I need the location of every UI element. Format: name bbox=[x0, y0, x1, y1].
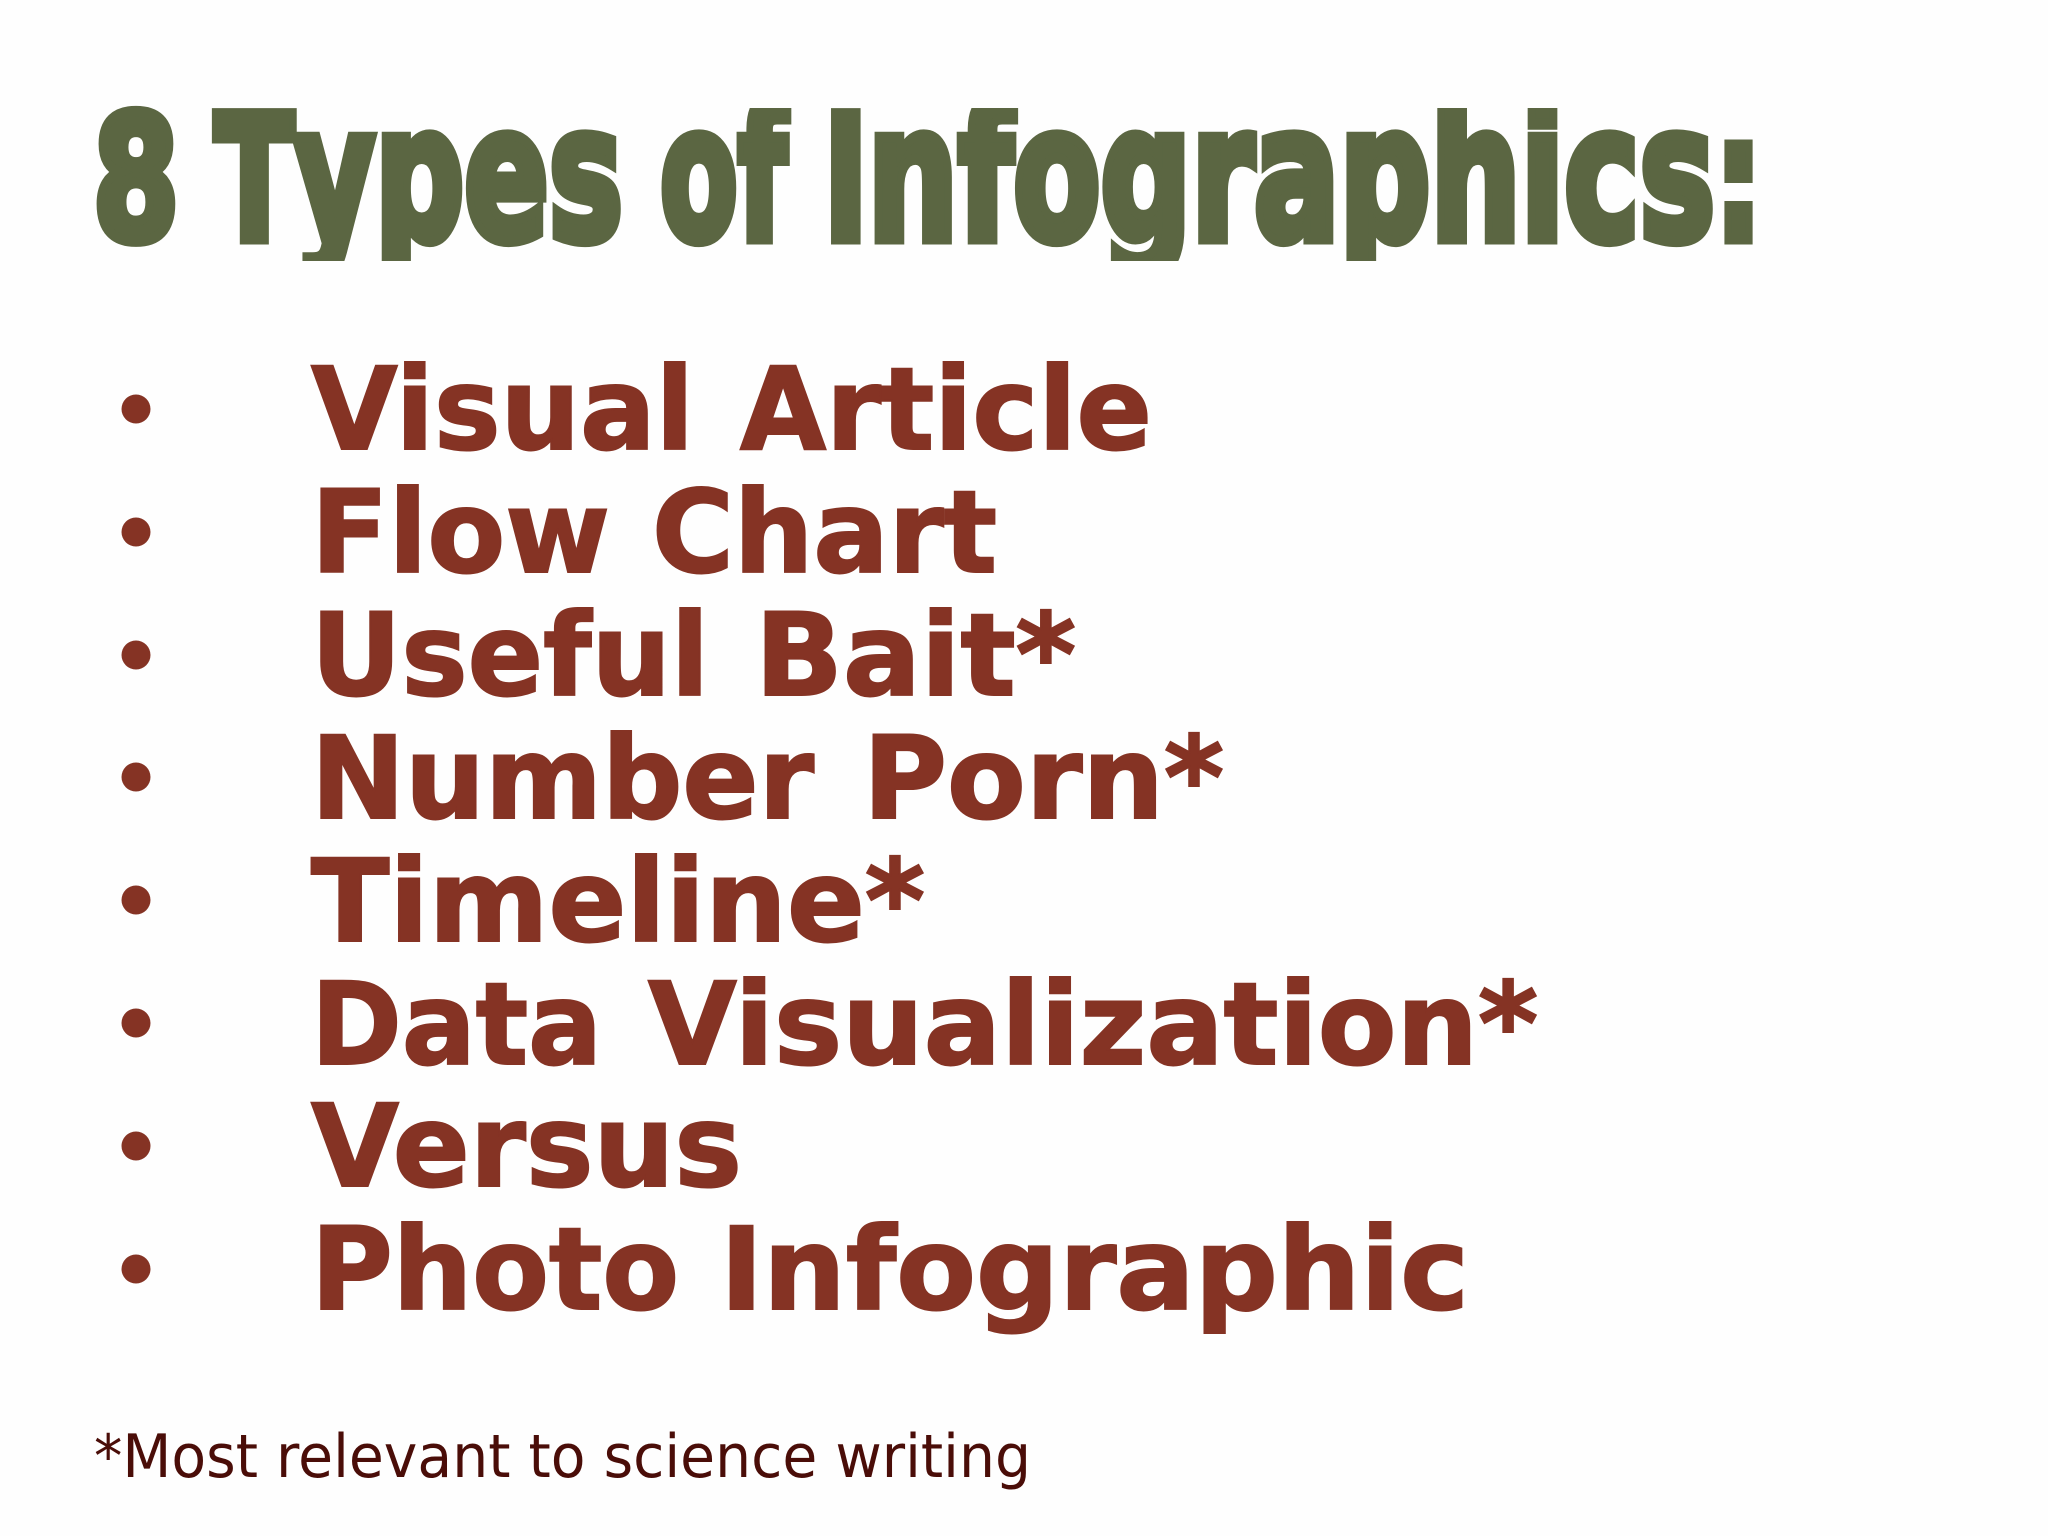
list item: Versus: Versus bbox=[311, 1080, 742, 1213]
list item: Useful Bait: Bait* bbox=[755, 589, 1076, 722]
list item: Photo Infographic: Photo bbox=[311, 1203, 679, 1336]
list item: Flow Chart: Flow bbox=[311, 466, 610, 599]
list item: Number Porn: Porn* bbox=[863, 712, 1224, 845]
list item: Useful Bait: Useful bbox=[311, 589, 709, 722]
list item: Data Visualization: Data bbox=[311, 958, 602, 1091]
list item: Flow Chart: Chart bbox=[652, 466, 997, 599]
footnote: *Most relevant to science writing bbox=[94, 1422, 1031, 1492]
list item: Number Porn bbox=[122, 712, 1224, 845]
bulleted list: infographic types bbox=[122, 343, 1538, 1336]
list item: Photo Infographic bbox=[122, 1203, 1469, 1336]
title: Types bbox=[215, 66, 623, 283]
list item: Data Visualization bbox=[122, 958, 1538, 1091]
list item: Versus bbox=[122, 1080, 742, 1213]
list item: Visual Article bbox=[122, 343, 1152, 476]
title: of bbox=[660, 66, 788, 283]
list item: Flow Chart bbox=[122, 466, 997, 599]
list item: Visual Article: Visual bbox=[311, 343, 694, 476]
list item: Data Visualization: Visualization* bbox=[648, 958, 1538, 1091]
list item: Timeline: Timeline* bbox=[311, 835, 925, 968]
list item: Visual Article: Article bbox=[740, 343, 1152, 476]
list item: Photo Infographic: Infographic bbox=[720, 1203, 1469, 1336]
list item: Useful Bait bbox=[122, 589, 1076, 722]
list item: Number Porn: Number bbox=[311, 712, 814, 845]
title bbox=[96, 106, 1753, 261]
title: 8 bbox=[93, 79, 179, 280]
